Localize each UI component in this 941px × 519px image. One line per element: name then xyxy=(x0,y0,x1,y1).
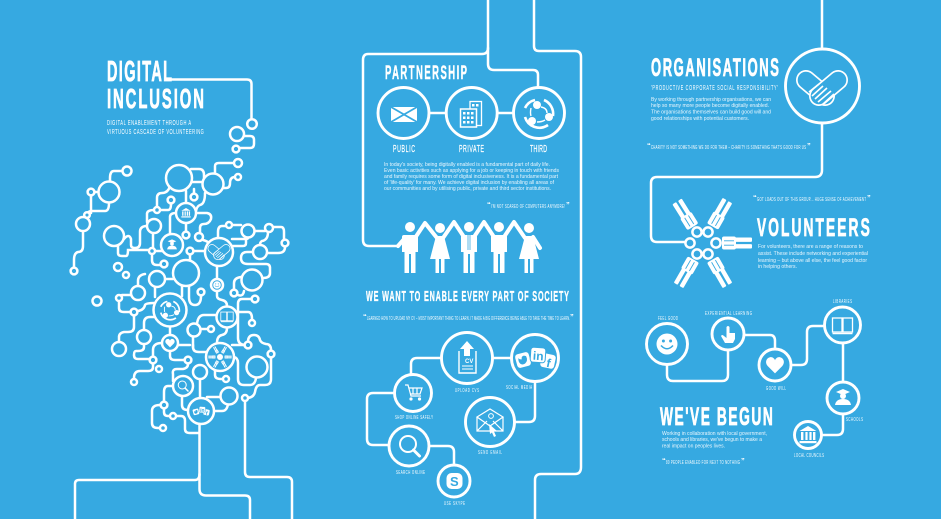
icon: public xyxy=(378,88,429,138)
map icon: third sector xyxy=(154,294,186,326)
icon: skype xyxy=(438,465,470,497)
map icon: bank xyxy=(176,203,196,223)
skill labels: SOCIAL MEDIA xyxy=(506,384,532,390)
begun body text: real impact on peoples lives. xyxy=(662,444,725,450)
map icon: book xyxy=(216,306,238,328)
pathway labels: FEEL GOOD xyxy=(658,315,678,321)
partnership body text: of 'life-quality' for many. We achieve digital inclusion by enabling all areas of xyxy=(384,180,554,186)
icon: private xyxy=(446,88,497,138)
map icon: graduate xyxy=(161,234,183,256)
volunteers body text: assist. These include networking and experiential xyxy=(758,251,868,257)
heading: organisations: ORGANISATIONS xyxy=(651,55,779,82)
scotland network map xyxy=(71,80,288,433)
icon: social media xyxy=(512,334,558,382)
quote: group: “ xyxy=(753,193,757,202)
heading: volunteers: VOLUNTEERS xyxy=(757,215,870,242)
pathway labels: LIBRARIES xyxy=(833,298,852,304)
organisations body text: The organisations themselves can build good will and xyxy=(651,110,771,116)
pathway labels: EXPERIENTIAL LEARNING xyxy=(705,310,752,316)
icon: third xyxy=(514,88,564,138)
quote: upload cv: “ xyxy=(363,312,367,321)
map icon: heart xyxy=(162,335,178,351)
panel: partnership rails xyxy=(363,0,581,519)
heading: partnership: PARTNERSHIP xyxy=(385,63,467,84)
partnership body text: Even basic activities such as applying for a job or keeping in touch with friends xyxy=(384,168,559,174)
quote: charity: ” xyxy=(807,141,811,150)
volunteers body text: learning – but above all else, the feel good factor xyxy=(758,258,867,264)
pathway labels: LOCAL COUNCILS xyxy=(794,452,824,458)
subtitle xyxy=(107,120,204,136)
begun pathway connectors xyxy=(667,326,843,435)
icon: upload cv xyxy=(442,332,492,384)
quote: eighty people: “ xyxy=(662,456,666,465)
skill labels: UPLOAD CVS xyxy=(455,387,479,393)
subtitle: DIGITAL ENABLEMENT THROUGH A xyxy=(107,120,191,127)
skill labels: SEARCH ONLINE xyxy=(396,469,425,475)
sector labels: PRIVATE xyxy=(459,142,484,155)
quote: group: ” xyxy=(867,193,871,202)
organisations body text: good relationships with potential customers. xyxy=(651,116,749,122)
sector labels: PUBLIC xyxy=(393,142,415,155)
partnership body text: our communities and by utilising public, private and third sector institutions. xyxy=(384,186,551,192)
map icon: search xyxy=(173,376,193,396)
sector connectors xyxy=(429,112,514,114)
icon: libraries xyxy=(824,307,860,343)
map icon: smile xyxy=(211,279,223,291)
quote: eighty people: ” xyxy=(741,456,745,465)
volunteers body text: in helping others. xyxy=(758,264,797,270)
skill labels: SHOP ONLINE SAFELY xyxy=(395,414,433,420)
icon: heart hands xyxy=(786,49,860,123)
title: digital inclusion xyxy=(107,54,204,114)
icon: shop xyxy=(394,374,432,412)
volunteers body text: For volunteers, there are a range of reasons to xyxy=(758,244,863,250)
icon: upload cv: CV xyxy=(465,359,473,365)
people holding hands xyxy=(398,222,540,273)
quote: eighty people: 80 PEOPLE ENABLED FOR NEXT TO NOTHING xyxy=(666,459,740,465)
skill labels xyxy=(395,384,532,506)
map icon: hands xyxy=(205,238,233,266)
title: digital inclusion: INCLUSION xyxy=(107,83,204,114)
partnership body text xyxy=(384,162,559,192)
begun body text xyxy=(662,431,767,450)
map connectors xyxy=(74,80,285,433)
quote: eighty people xyxy=(662,456,745,465)
sector labels: THIRD xyxy=(530,142,547,155)
icon: search xyxy=(389,426,429,466)
quote: upload cv: ” xyxy=(570,312,574,321)
icon: schools xyxy=(827,382,859,414)
volunteers body text xyxy=(758,244,868,270)
partnership body text: and family requires some form of digital inclusiveness. It is a fundamental part xyxy=(384,174,558,180)
organisations body text xyxy=(651,97,771,122)
organisations rails xyxy=(651,0,822,242)
organisations body text: By working through partnership organisations, we can xyxy=(651,97,771,103)
subtitle: VIRTUOUS CASCADE OF VOLUNTEERING xyxy=(107,129,204,136)
quote: charity: “ xyxy=(647,141,651,150)
icon: send email xyxy=(466,398,514,446)
map nodes xyxy=(71,119,288,431)
quote: computers: “ xyxy=(487,200,491,209)
pathway labels: SCHOOLS xyxy=(846,416,863,422)
quote: upload cv xyxy=(363,312,574,321)
quote: group: GOT LOADS OUT OF THIS GROUP... HUGE SENSE OF ACHIEVEMENT xyxy=(757,196,866,202)
quote: computers: I'M NOT SCARED OF COMPUTERS ANYMORE! xyxy=(491,203,565,209)
map icon: social xyxy=(188,398,214,424)
skills pathway connectors xyxy=(367,358,535,465)
heading: we've begun: WE'VE BEGUN xyxy=(660,404,773,431)
icon: experiential learning xyxy=(712,318,744,350)
partnership body text: In today's society, being digitally enabled is a fundamental part of daily life. xyxy=(384,162,550,168)
icon: feel good xyxy=(646,324,688,364)
skill labels: SEND EMAIL xyxy=(478,449,502,455)
organisations body text: help so many more people become digitally enabled. xyxy=(651,103,769,109)
pathway labels xyxy=(658,298,863,458)
begun body text: schools and libraries, we've begun to make a xyxy=(662,437,762,443)
quote: upload cv: LEARNED HOW TO UPLOAD MY CV – MOST IMPORTANT THING TO LEARN. IT MADE A BIG DIFFERENCE BEING ABLE TO TAKE THE TIME TO LEARN. xyxy=(367,315,570,321)
begun body text: Working in collaboration with local government, xyxy=(662,431,767,437)
title: digital inclusion: DIGITAL xyxy=(107,54,172,87)
organisations subheading: 'PRODUCTIVE CORPORATE SOCIAL RESPONSIBILITY' xyxy=(651,85,778,93)
quote: computers xyxy=(487,200,570,209)
sector labels xyxy=(393,142,547,155)
icon: skype: S xyxy=(450,474,459,489)
trunk lines below the map xyxy=(75,401,292,519)
heading: we want to enable: WE WANT TO ENABLE EVERY PART OF SOCIETY xyxy=(366,290,569,305)
quote: charity: CHARITY IS NOT SOMETHING WE DO FOR THEM – CHARITY IS SOMETHING THAT'S GOOD FOR US xyxy=(651,144,806,150)
quote: computers: ” xyxy=(566,200,570,209)
map icon: volunteers xyxy=(206,343,234,371)
skill labels: USE SKYPE xyxy=(444,500,465,506)
icon: good will xyxy=(759,349,791,381)
quote: group xyxy=(753,193,871,202)
pathway labels: GOOD WILL xyxy=(766,385,786,391)
icon: local councils xyxy=(794,422,822,448)
quote: charity xyxy=(647,141,811,150)
volunteers ring icon xyxy=(672,197,752,289)
